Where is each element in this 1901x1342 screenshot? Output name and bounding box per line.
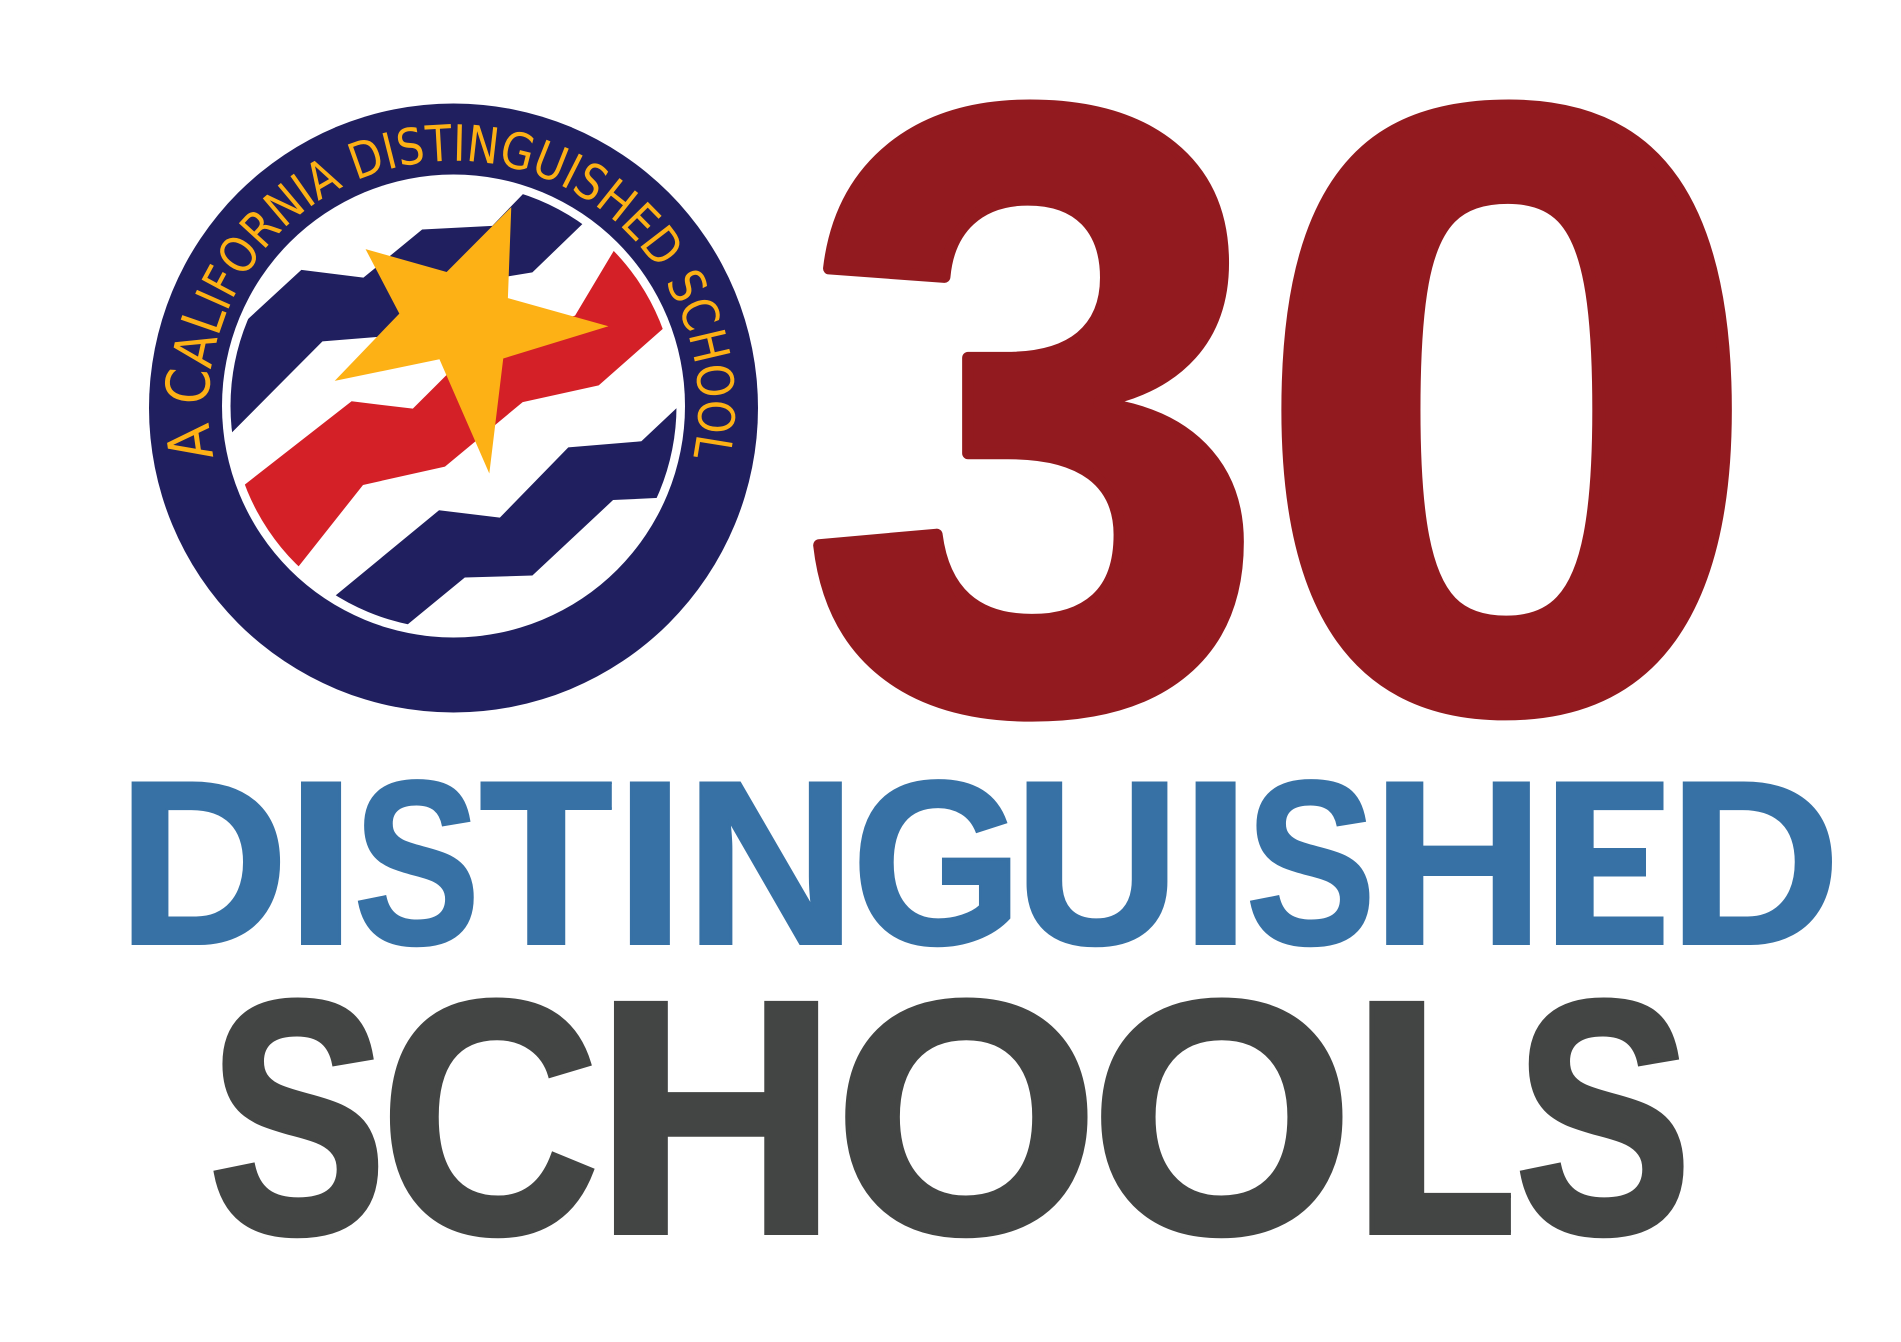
heading: DISTINGUISHED: U: [1014, 733, 1180, 994]
heading: DISTINGUISHED: I: [285, 733, 357, 994]
heading: DISTINGUISHED: E: [1541, 732, 1703, 994]
gold star: [335, 207, 608, 474]
heading: DISTINGUISHED: S: [1246, 732, 1376, 994]
badge stripes: [230, 194, 676, 624]
heading: DISTINGUISHED: D: [1668, 733, 1841, 994]
heading: SCHOOLS: S: [1514, 931, 1692, 1303]
heading: SCHOOLS: C: [380, 931, 600, 1303]
heading: DISTINGUISHED: H: [1371, 733, 1545, 994]
badge curved text: A CALIFORNIA DISTINGUISHED SCHOOL: [164, 124, 736, 457]
heading: DISTINGUISHED: N: [685, 733, 857, 994]
badge outer navy ring: [149, 104, 758, 712]
heading: SCHOOLS: O: [1090, 932, 1354, 1304]
heading: SCHOOLS: S: [208, 932, 387, 1304]
navy lower stripe: [336, 408, 676, 624]
heading: SCHOOLS: L: [1349, 931, 1559, 1303]
heading: SCHOOLS: O: [834, 932, 1099, 1304]
badge: California Distinguished School seal: [149, 104, 758, 712]
heading: DISTINGUISHED: T: [471, 732, 621, 993]
red middle stripe: [244, 250, 663, 566]
heading: DISTINGUISHED: S: [354, 733, 480, 994]
heading: DISTINGUISHED: D: [117, 733, 289, 994]
navy upper stripe: [230, 194, 582, 432]
heading: DISTINGUISHED: G: [852, 733, 1023, 994]
heading: DISTINGUISHED: I: [1180, 733, 1251, 994]
heading: DISTINGUISHED: I: [614, 733, 686, 994]
heading: SCHOOLS: H: [594, 932, 838, 1304]
heading: DISTINGUISHED: [132, 779, 1832, 948]
badge inner white disc: [222, 174, 685, 638]
heading: SCHOOLS: [213, 998, 1684, 1238]
big number 30: [800, 0, 1763, 889]
